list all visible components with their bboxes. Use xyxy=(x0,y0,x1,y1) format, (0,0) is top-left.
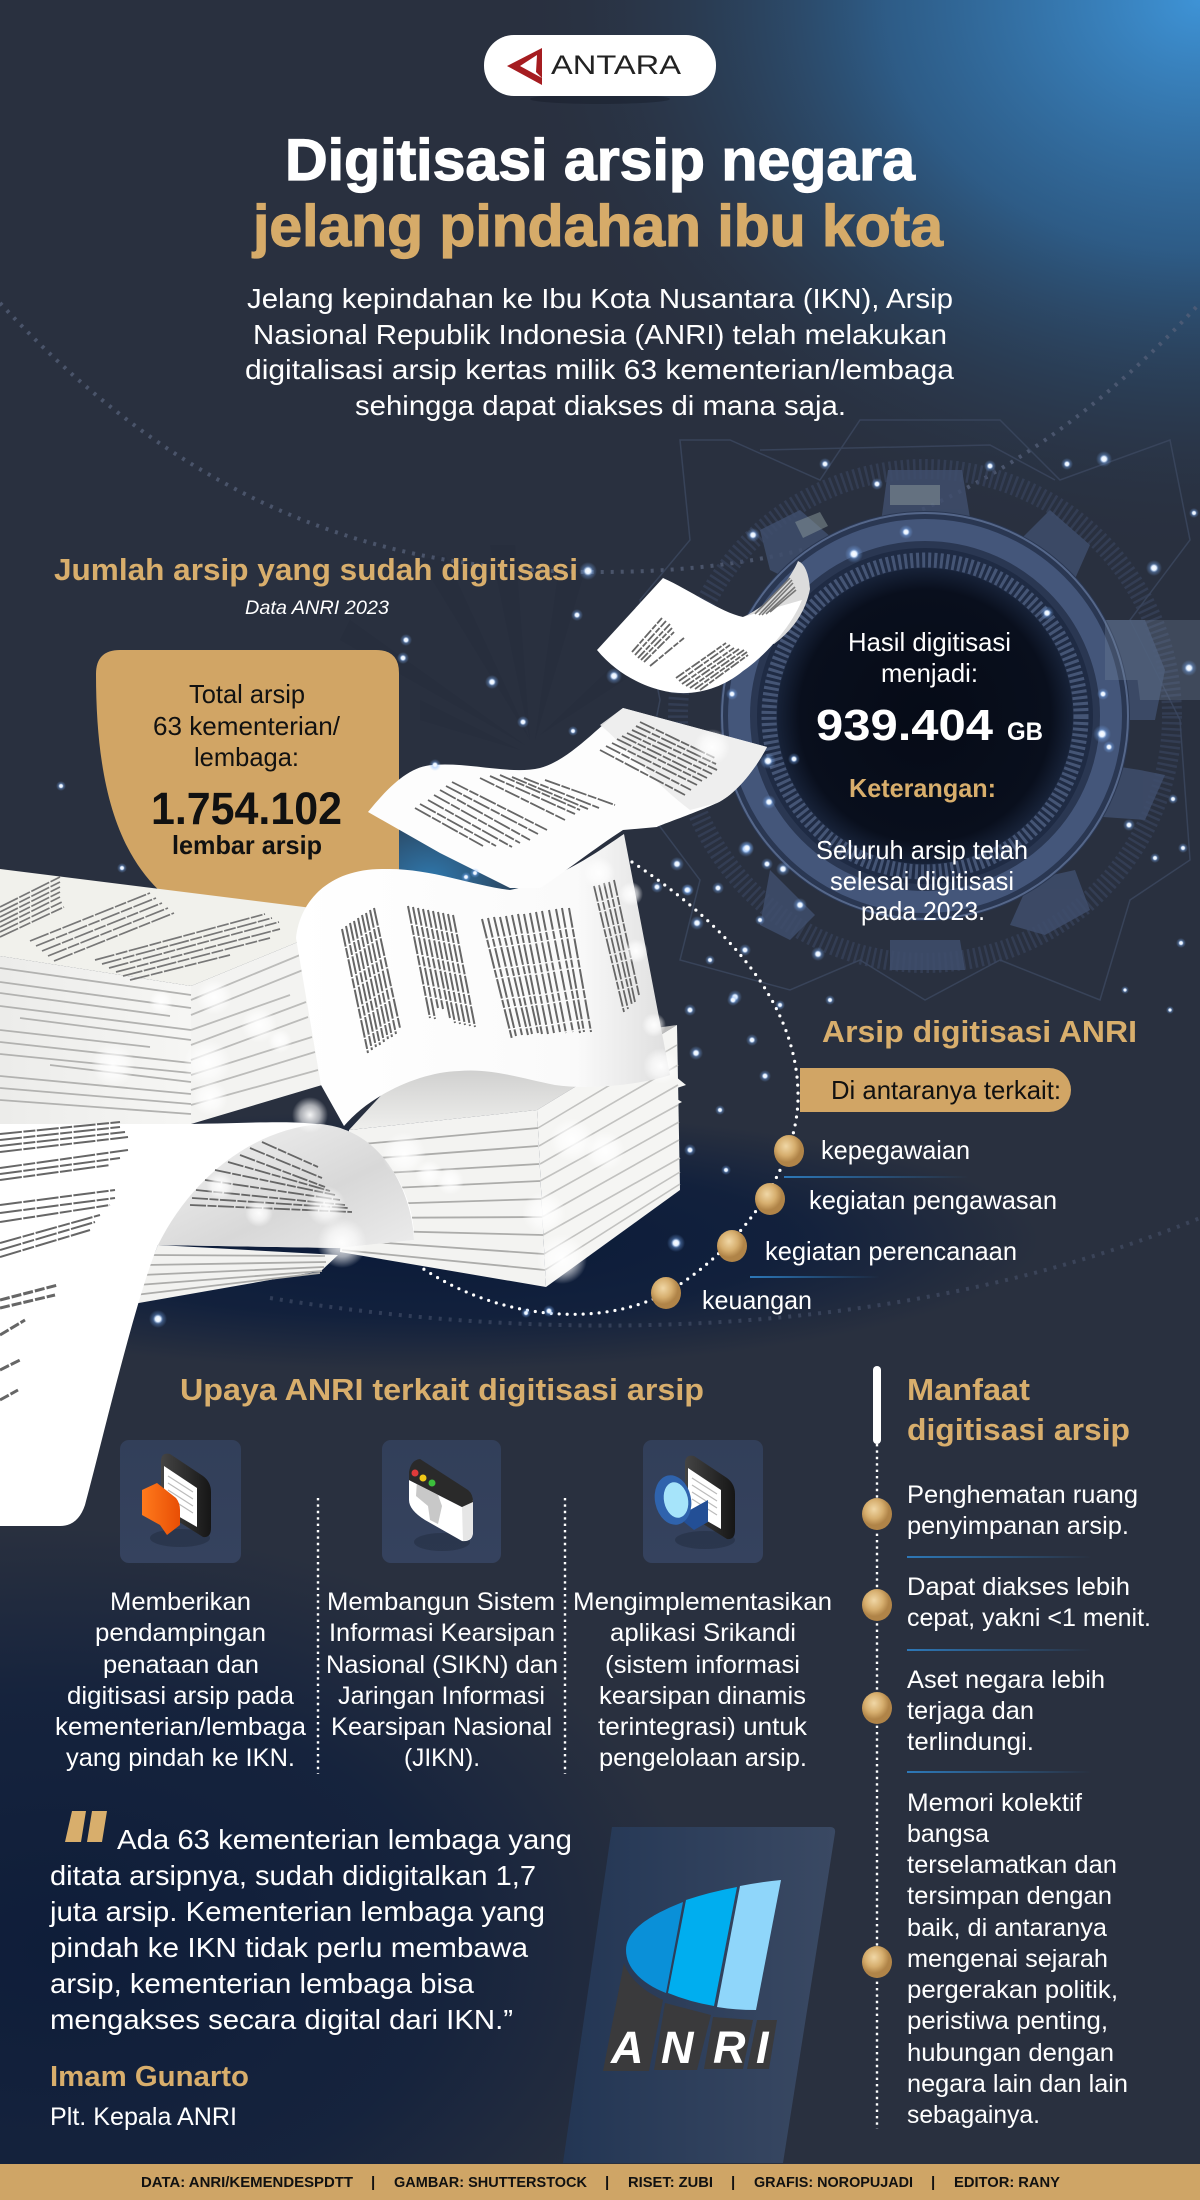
benefit: akses xyxy=(862,1573,1151,1632)
quote: arsip, kementerian lembaga bisa xyxy=(50,1968,474,1999)
gear centre text: Seluruh arsip telah xyxy=(816,835,1028,865)
panel: manfaat: Manfaat xyxy=(907,1372,1030,1407)
heading: arsip digitisasi ANRI: Arsip digitisasi ANRI xyxy=(822,1014,1137,1049)
intro text: digitalisasi arsip kertas milik 63 kementerian/lembaga xyxy=(245,354,954,385)
quote: juta arsip. Kementerian lembaga yang xyxy=(49,1896,545,1927)
intro text: Nasional Republik Indonesia (ANRI) telah melakukan xyxy=(253,319,947,350)
card: SIKN: (JIKN). xyxy=(404,1744,480,1772)
item: kepegawaian xyxy=(774,1135,970,1167)
item: kegiatan pengawasan: kegiatan pengawasan xyxy=(809,1185,1057,1215)
quote: Imam Gunarto xyxy=(50,2061,249,2093)
benefit: memori: sebagainya. xyxy=(907,2101,1040,2129)
footer credits: | xyxy=(731,2174,735,2191)
stack: right xyxy=(340,1025,686,1287)
list: arsip digitisasi xyxy=(651,1135,1057,1315)
sheet: curl xyxy=(0,1122,414,1526)
gear centre text: menjadi: xyxy=(881,658,978,688)
footer credits: DATA: ANRI/KEMENDESPDTT xyxy=(141,2174,353,2191)
gear centre text: Keterangan: xyxy=(849,773,996,803)
card: SIKN: Nasional (SIKN) dan xyxy=(326,1651,558,1679)
benefit: memori: mengenai sejarah xyxy=(907,1945,1108,1973)
card: Srikandi: pengelolaan arsip. xyxy=(599,1744,807,1772)
item: keuangan xyxy=(651,1277,812,1315)
benefit: memori xyxy=(862,1789,1128,2129)
panel: total arsip xyxy=(96,650,399,930)
gear centre text: pada 2023. xyxy=(861,896,985,926)
card: pendampingan: Memberikan xyxy=(110,1588,251,1616)
benefit: memori: tersimpan dengan xyxy=(907,1882,1112,1910)
card: pendampingan: yang pindah ke IKN. xyxy=(66,1744,295,1772)
logo: ANRI xyxy=(603,1880,781,2073)
card: SIKN xyxy=(326,1440,558,1772)
benefit: ruang: Penghematan ruang xyxy=(907,1481,1138,1509)
benefit: memori: bangsa xyxy=(907,1820,989,1848)
item: kegiatan perencanaan xyxy=(717,1230,1017,1266)
benefit: memori: hubungan dengan xyxy=(907,2039,1114,2067)
footer credits: GAMBAR: SHUTTERSTOCK xyxy=(394,2174,587,2191)
gear graphic xyxy=(678,469,1200,970)
icon: phone with note xyxy=(120,1440,241,1563)
benefit: akses: Dapat diakses lebih xyxy=(907,1573,1130,1601)
card: Srikandi: aplikasi Srikandi xyxy=(610,1619,796,1647)
heading: upaya ANRI: Upaya ANRI terkait digitisasi arsip xyxy=(180,1372,704,1407)
pill: di antaranya terkait xyxy=(800,1068,1071,1112)
logo: ANRI: ANRI xyxy=(610,2022,770,2073)
panel: manfaat xyxy=(862,1366,1151,2129)
footer credits: | xyxy=(371,2174,375,2191)
item: kegiatan perencanaan: kegiatan perencanaan xyxy=(765,1236,1017,1266)
card: pendampingan: digitisasi arsip pada xyxy=(67,1682,294,1710)
card: pendampingan: penataan dan xyxy=(103,1651,259,1679)
heading: jumlah arsip: Jumlah arsip yang sudah digitisasi xyxy=(54,552,578,587)
quote: Ada 63 kementerian lembaga yang xyxy=(117,1824,572,1855)
gear centre text xyxy=(816,627,1043,926)
footer credits: GRAFIS: NOROPUJADI xyxy=(754,2174,913,2191)
panel: total arsip: 1.754.102 xyxy=(151,783,342,834)
card: SIKN: Kearsipan Nasional xyxy=(331,1713,552,1741)
card: pendampingan: pendampingan xyxy=(95,1619,266,1647)
benefit: memori: terselamatkan dan xyxy=(907,1851,1117,1879)
quote: Plt. Kepala ANRI xyxy=(50,2103,237,2131)
benefit: aset xyxy=(862,1666,1105,1756)
panel: total arsip: lembaga: xyxy=(194,742,299,772)
benefit: ruang: penyimpanan arsip. xyxy=(907,1512,1129,1540)
intro text xyxy=(245,283,954,421)
quote xyxy=(49,1811,572,2131)
footer credits: | xyxy=(605,2174,609,2191)
logo: ANTARA xyxy=(484,35,716,104)
sheet: middle flying xyxy=(368,708,767,888)
card: Srikandi: (sistem informasi xyxy=(605,1651,800,1679)
benefit: memori: peristiwa penting, xyxy=(907,2007,1108,2035)
benefit: aset: Aset negara lebih xyxy=(907,1666,1105,1694)
panel: total arsip: Total arsip xyxy=(189,679,305,709)
panel: total arsip: 63 kementerian/ xyxy=(153,711,341,741)
benefit: aset: terjaga dan xyxy=(907,1697,1034,1725)
card: Srikandi: Mengimplementasikan xyxy=(573,1588,832,1616)
card: pendampingan xyxy=(55,1440,306,1772)
dotted path xyxy=(422,862,798,1314)
pill: di antaranya terkait: Di antaranya terkait: xyxy=(831,1075,1061,1105)
quote: pindah ke IKN tidak perlu membawa xyxy=(50,1932,528,1963)
gear centre text: GB xyxy=(1007,718,1043,746)
stars and bokeh xyxy=(56,451,1199,1328)
quote: mengakses secara digital dari IKN.” xyxy=(50,2004,513,2035)
footer credits xyxy=(0,2164,1200,2200)
item: keuangan: keuangan xyxy=(702,1285,812,1315)
benefit: memori: negara lain dan lain xyxy=(907,2070,1128,2098)
benefit: memori: pergerakan politik, xyxy=(907,1976,1118,2004)
footer credits: | xyxy=(931,2174,935,2191)
benefit: aset: terlindungi. xyxy=(907,1728,1034,1756)
card: SIKN: Jaringan Informasi xyxy=(338,1682,545,1710)
gear centre text: 939.404 xyxy=(816,701,994,750)
title: jelang pindahan ibu kota xyxy=(252,194,944,259)
footer credits: RISET: ZUBI xyxy=(628,2174,713,2191)
card: SIKN: Membangun Sistem xyxy=(327,1588,555,1616)
panel: manfaat: digitisasi arsip xyxy=(907,1412,1130,1447)
benefit: memori: Memori kolektif xyxy=(907,1789,1082,1817)
stack: left xyxy=(0,869,322,1124)
gear centre text: selesai digitisasi xyxy=(830,866,1014,896)
heading: jumlah arsip xyxy=(54,552,578,619)
panel: ANRI logo xyxy=(563,1827,835,2163)
panel: total arsip: lembar arsip xyxy=(172,830,322,860)
gear centre text: Hasil digitisasi xyxy=(848,627,1011,657)
intro text: sehingga dapat diakses di mana saja. xyxy=(355,390,846,421)
title: Digitisasi arsip negara xyxy=(285,128,916,193)
sheet: top flying xyxy=(597,561,810,693)
card: Srikandi: terintegrasi) untuk xyxy=(598,1713,808,1741)
intro text: Jelang kepindahan ke Ibu Kota Nusantara (IKN), Arsip xyxy=(247,283,953,314)
sheet: large floating xyxy=(296,834,670,1126)
icon: browser window xyxy=(382,1440,501,1563)
card: Srikandi: kearsipan dinamis xyxy=(599,1682,806,1710)
icon: quote mark xyxy=(65,1811,107,1842)
item: kepegawaian: kepegawaian xyxy=(821,1135,970,1165)
benefit: akses: cepat, yakni <1 menit. xyxy=(907,1604,1151,1632)
heading: jumlah arsip: Data ANRI 2023 xyxy=(245,598,389,619)
logo: ANTARA: ANTARA xyxy=(551,50,681,80)
card: pendampingan: kementerian/lembaga xyxy=(55,1713,306,1741)
title xyxy=(252,128,944,259)
card: Srikandi xyxy=(573,1440,832,1772)
quote: ditata arsipnya, sudah didigitalkan 1,7 xyxy=(50,1860,536,1891)
benefit: memori: baik, di antaranya xyxy=(907,1914,1107,1942)
benefit: ruang xyxy=(862,1481,1138,1540)
illustration: paper stacks xyxy=(0,561,810,1526)
card: SIKN: Informasi Kearsipan xyxy=(329,1619,555,1647)
footer credits: EDITOR: RANY xyxy=(954,2174,1060,2191)
stack: lower left xyxy=(133,1245,338,1304)
icon: magnifier on phone xyxy=(643,1440,763,1563)
